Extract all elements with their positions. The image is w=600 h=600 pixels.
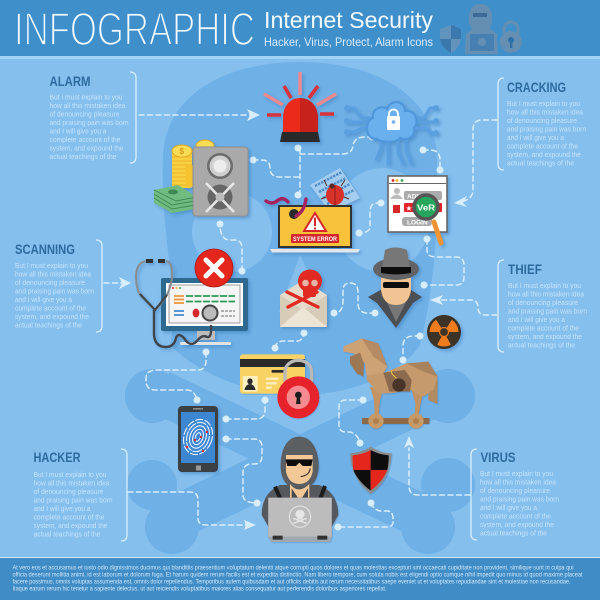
icon: cloud with circuits and lock bbox=[344, 102, 439, 165]
text block: scanning: actual teachings of the bbox=[15, 320, 82, 330]
icon: login window with magnifier: LOGIN bbox=[407, 220, 428, 226]
footer text: At vero eos et accusamus et iusto odio dignissimos ducimus qui blanditiis praesentium voluptatum deleniti atque corrupti quos dolores et quas molestias excepturi sint occaecati cupiditate non provident, similique sunt in culpa qui bbox=[12, 566, 574, 572]
heading: hacker: HACKER bbox=[34, 449, 80, 465]
text block: alarm: system, and expound the bbox=[50, 144, 124, 152]
text block: thief: and praising pain was born bbox=[508, 306, 587, 316]
text block: cracking: and I will give you a bbox=[507, 133, 565, 142]
monitor bbox=[197, 331, 215, 340]
text block: hacker: system, and expound the bbox=[34, 521, 108, 530]
text block: virus: how all this mistaken idea bbox=[480, 478, 557, 486]
text block: alarm: actual teachings of the bbox=[50, 152, 116, 161]
worm bbox=[266, 199, 306, 219]
binary grid bbox=[310, 168, 360, 212]
icon: trojan horse bbox=[343, 338, 438, 429]
text block: hacker bbox=[34, 470, 112, 538]
text block: scanning: system, and expound the bbox=[15, 312, 89, 321]
text block: alarm: of denouncing pleasure bbox=[50, 110, 120, 118]
icon: login window with magnifier: VeR bbox=[417, 204, 435, 212]
heading: virus: VIRUS bbox=[480, 449, 516, 465]
heading: thief: THIEF bbox=[508, 261, 542, 277]
title INFOGRAPHIC: INFOGRAPHIC bbox=[14, 3, 255, 55]
icon: red and black shield bbox=[350, 447, 392, 494]
heading: alarm: ALARM bbox=[50, 73, 90, 89]
text block: virus: complete account of the bbox=[480, 512, 551, 520]
panel: hacker text bbox=[34, 449, 127, 541]
text block: scanning: But I must explain to you bbox=[15, 261, 88, 270]
icon: smartphone with fingerprint bbox=[178, 406, 218, 472]
icon: header hacker bbox=[465, 4, 498, 54]
text block: hacker: actual teachings of the bbox=[34, 530, 100, 538]
icon: login window with magnifier bbox=[388, 176, 447, 243]
icon: safe bbox=[193, 147, 248, 216]
panel: alarm text bbox=[50, 72, 136, 163]
icon: envelope with red skull bbox=[280, 270, 327, 327]
text block: cracking: system, and expound the bbox=[507, 150, 581, 159]
heading: scanning: SCANNING bbox=[15, 241, 75, 257]
header band bbox=[0, 0, 600, 59]
icon: thief in hat and coat bbox=[368, 248, 422, 328]
warning triangle bbox=[304, 213, 326, 231]
icon: header shield bbox=[440, 25, 461, 53]
dashed connector arrows bbox=[104, 109, 497, 530]
text block: alarm: how all this mistaken idea bbox=[50, 101, 126, 110]
icon: radiation sign bbox=[427, 315, 461, 349]
text block: thief: how all this mistaken idea bbox=[508, 290, 585, 298]
panel: scanning text bbox=[15, 240, 102, 332]
text block: thief: and I will give you a bbox=[508, 315, 566, 324]
text block: alarm: and I will give you a bbox=[50, 126, 107, 136]
text block: hacker: and praising pain was born bbox=[34, 496, 112, 504]
text block: scanning bbox=[15, 261, 94, 330]
text block: virus: and I will give you a bbox=[480, 503, 538, 512]
footer text bbox=[12, 566, 583, 592]
icon: hacker with laptop bbox=[262, 437, 338, 542]
text block: hacker: complete account of the bbox=[34, 512, 104, 522]
icon: login window with magnifier: ADMIN bbox=[407, 194, 429, 200]
panel: virus text bbox=[471, 449, 559, 540]
icon: credit card with padlock bbox=[240, 354, 319, 418]
subtitle icon list: Hacker, Virus, Protect, Alarm Icons bbox=[264, 35, 433, 49]
text block: cracking: how all this mistaken idea bbox=[507, 108, 584, 116]
text block: thief: actual teachings of the bbox=[508, 340, 575, 350]
text block: scanning: and praising pain was born bbox=[15, 286, 94, 296]
icon: infected laptop with system error bbox=[266, 168, 360, 252]
subtitle Internet Security: Internet Security bbox=[264, 7, 434, 33]
text block: cracking: complete account of the bbox=[507, 142, 578, 150]
text block: scanning: and I will give you a bbox=[15, 295, 73, 304]
icon: gold coins and money bbox=[154, 140, 214, 213]
text block: thief: complete account of the bbox=[508, 324, 579, 332]
text block: thief: system, and expound the bbox=[508, 332, 582, 341]
text block: alarm bbox=[50, 92, 128, 161]
text block: virus bbox=[480, 469, 559, 538]
text block: scanning: of denouncing pleasure bbox=[15, 278, 85, 287]
laptop body bbox=[278, 205, 352, 248]
footer text: Itaque earum rerum hic tenetur a sapiente delectus, ut aut reiciendis voluptatibus maiores alias consequatur aut perferendis doloribus asperiores repellat. bbox=[12, 586, 387, 592]
text block: thief: But I must explain to you bbox=[508, 281, 581, 290]
text block: virus: of denouncing pleasure bbox=[480, 486, 550, 495]
icon: alarm siren bbox=[264, 72, 336, 142]
stethoscope bbox=[136, 261, 218, 347]
footer band bbox=[0, 557, 600, 600]
text block: scanning: complete account of the bbox=[15, 304, 86, 312]
icon: login window with magnifier: ★★ bbox=[406, 204, 419, 212]
icon: monitor with stethoscope and error badge bbox=[136, 249, 248, 347]
text block: cracking: and praising pain was born bbox=[507, 124, 586, 134]
text block: thief: of denouncing pleasure bbox=[508, 298, 578, 307]
text block: alarm: complete account of the bbox=[50, 135, 120, 144]
panel: thief text bbox=[498, 260, 587, 352]
error badge bbox=[195, 249, 233, 287]
text block: cracking: actual teachings of the bbox=[507, 158, 574, 168]
heading: cracking: CRACKING bbox=[507, 79, 566, 95]
icon: gold coins and money: $ bbox=[180, 147, 184, 156]
icon: header padlock bbox=[500, 22, 522, 53]
text block: cracking: But I must explain to you bbox=[507, 99, 580, 108]
text block: virus: system, and expound the bbox=[480, 520, 554, 529]
text block: hacker: But I must explain to you bbox=[34, 470, 106, 479]
text block: alarm: But I must explain to you bbox=[50, 92, 122, 102]
text block: hacker: and I will give you a bbox=[34, 504, 91, 513]
text block: cracking bbox=[507, 99, 586, 168]
text block: thief bbox=[508, 281, 587, 350]
text block: alarm: and praising pain was born bbox=[50, 118, 128, 127]
text block: virus: actual teachings of the bbox=[480, 528, 547, 538]
text block: scanning: how all this mistaken idea bbox=[15, 270, 92, 278]
text block: virus: and praising pain was born bbox=[480, 494, 559, 504]
background skull and crossbones silhouette bbox=[125, 62, 475, 554]
text block: virus: But I must explain to you bbox=[480, 469, 553, 478]
text block: cracking: of denouncing pleasure bbox=[507, 116, 577, 125]
error banner: SYSTEM ERROR bbox=[293, 236, 337, 243]
text block: hacker: how all this mistaken idea bbox=[34, 478, 110, 488]
panel: cracking text bbox=[498, 78, 586, 170]
bug bbox=[321, 180, 349, 205]
text block: hacker: of denouncing pleasure bbox=[34, 487, 104, 496]
